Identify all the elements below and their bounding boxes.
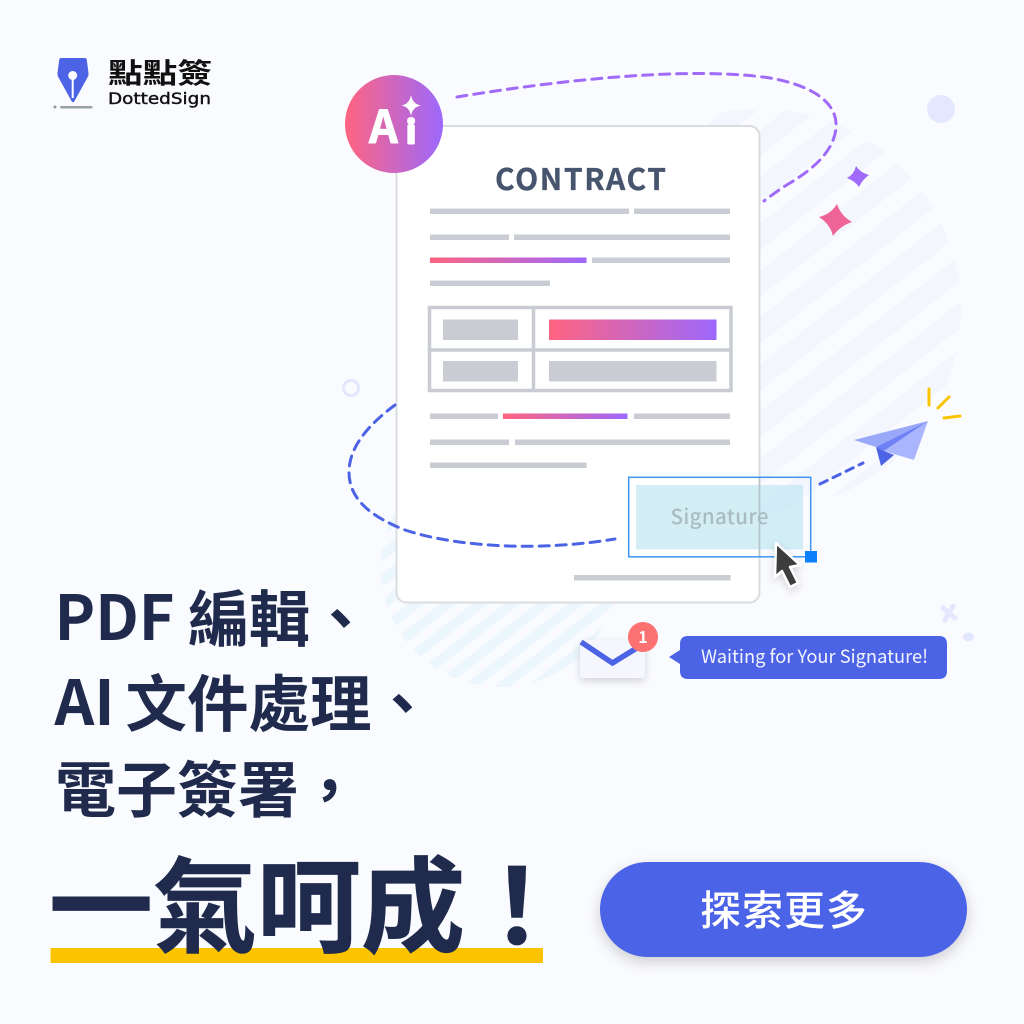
document edge seen through signature <box>758 478 760 556</box>
button: explore more <box>600 862 967 957</box>
headline line 2: AI <box>54 653 115 743</box>
headline line 1: PDF <box>54 568 175 658</box>
icon: AI badge: i <box>406 108 416 152</box>
resize handle <box>805 551 817 562</box>
decorative cross <box>943 606 955 620</box>
signature field <box>629 477 817 562</box>
table <box>430 308 731 390</box>
headline line 1 <box>54 568 371 659</box>
purple dashed path <box>457 74 836 201</box>
document sheet <box>396 126 760 602</box>
decorative dot <box>963 632 974 642</box>
selection frame <box>629 477 811 557</box>
headline <box>54 568 433 830</box>
decorative circle top right <box>927 95 955 123</box>
headline line 3: 電子簽署， <box>55 741 360 830</box>
headline emphasis: 一氣呵成！ <box>49 823 569 974</box>
logo wordmark chinese: 點點簽 <box>108 58 212 89</box>
logo <box>54 58 212 108</box>
icon: purple sparkle <box>847 166 869 187</box>
icon: paper plane <box>854 421 928 466</box>
striped background circle lower left <box>381 449 619 687</box>
icon: pink sparkle <box>819 204 852 236</box>
button: explore more: 探索更多 <box>700 877 868 937</box>
striped background circle upper right <box>559 109 961 511</box>
blue dashed path <box>349 405 615 546</box>
headline line 2: 文件處理、 <box>126 655 433 744</box>
text lines lower <box>430 414 730 580</box>
arrow: dashes to paper plane <box>820 463 863 484</box>
logo wordmark latin: DottedSign <box>108 89 211 108</box>
highlighted line lower <box>503 414 628 419</box>
icon: mouse cursor <box>775 543 800 587</box>
highlighted line upper <box>430 258 586 263</box>
decorative ring left <box>344 380 358 396</box>
icon: yellow sparks <box>929 389 960 418</box>
icon: AI badge: A <box>368 91 399 156</box>
signature fill <box>636 485 803 550</box>
panel: contract document <box>396 126 760 602</box>
icon: AI badge <box>345 75 443 173</box>
document heading: CONTRACT <box>495 155 666 199</box>
yellow underline <box>50 948 543 963</box>
icon: pen nib <box>54 58 92 108</box>
notification bubble <box>669 636 947 679</box>
signature label: Signature <box>670 500 768 530</box>
icon: envelope with badge <box>580 622 658 678</box>
notification bubble: Waiting for Your Signature! <box>701 643 928 669</box>
headline line 1: 編輯、 <box>188 570 371 659</box>
icon: envelope with badge: 1 <box>638 624 648 648</box>
text lines upper <box>430 208 730 286</box>
